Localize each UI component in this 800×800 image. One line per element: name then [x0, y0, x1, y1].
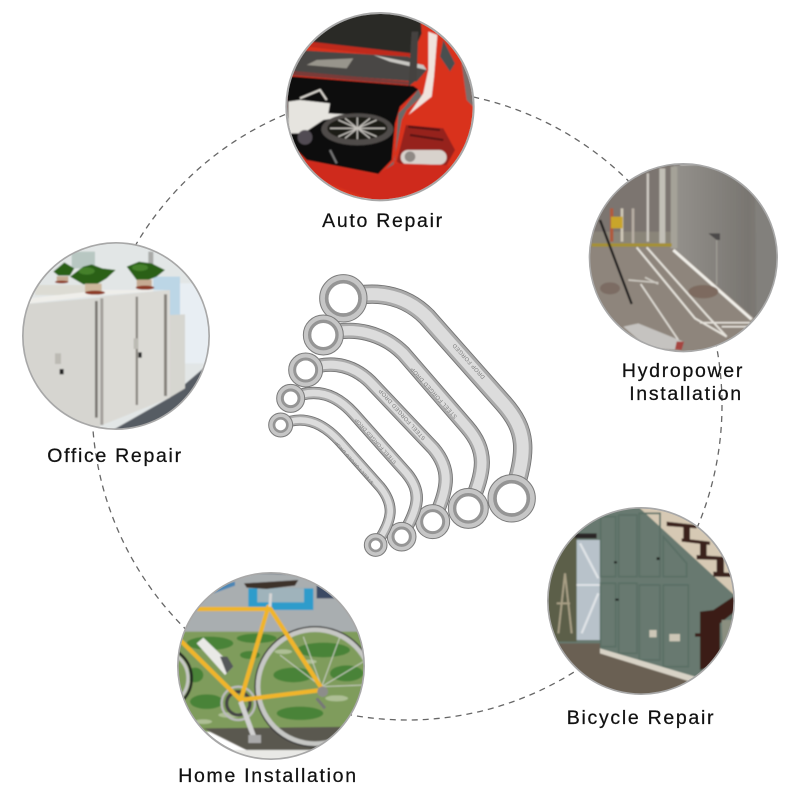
wrench 2: STEEL FORGED DROP	[410, 365, 459, 419]
wrench 2	[303, 315, 488, 528]
wrench 1 (largest)	[320, 275, 535, 522]
label: hydropower installation: Hydropower	[622, 360, 744, 382]
label: bicycle repair: Bicycle Repair	[567, 707, 715, 729]
photo: hydropower installation	[587, 160, 780, 360]
wrench 5 (smallest)	[269, 413, 390, 556]
label: auto repair: Auto Repair	[322, 210, 444, 232]
photo: bicycle repair	[547, 507, 735, 695]
wrench set	[269, 275, 535, 556]
label: office repair: Office Repair	[47, 445, 183, 467]
wrench 5 (smallest): STEEL FORGED DROP	[333, 440, 375, 485]
wrench 3: STEEL FORGED DROP	[378, 387, 427, 441]
label: home installation: Home Installation	[178, 765, 358, 787]
wrench 4: STEEL FORGED DROP	[353, 416, 398, 465]
wrench 3	[289, 353, 450, 539]
wrench 1 (largest): DROP FORGED	[452, 342, 487, 380]
photo: auto repair	[280, 10, 480, 203]
photo: office repair	[22, 242, 210, 430]
wrench 4	[277, 384, 417, 551]
photo: home installation	[177, 572, 365, 760]
label: hydropower installation: Installation	[629, 383, 743, 405]
dashed connector ring	[92, 90, 722, 720]
